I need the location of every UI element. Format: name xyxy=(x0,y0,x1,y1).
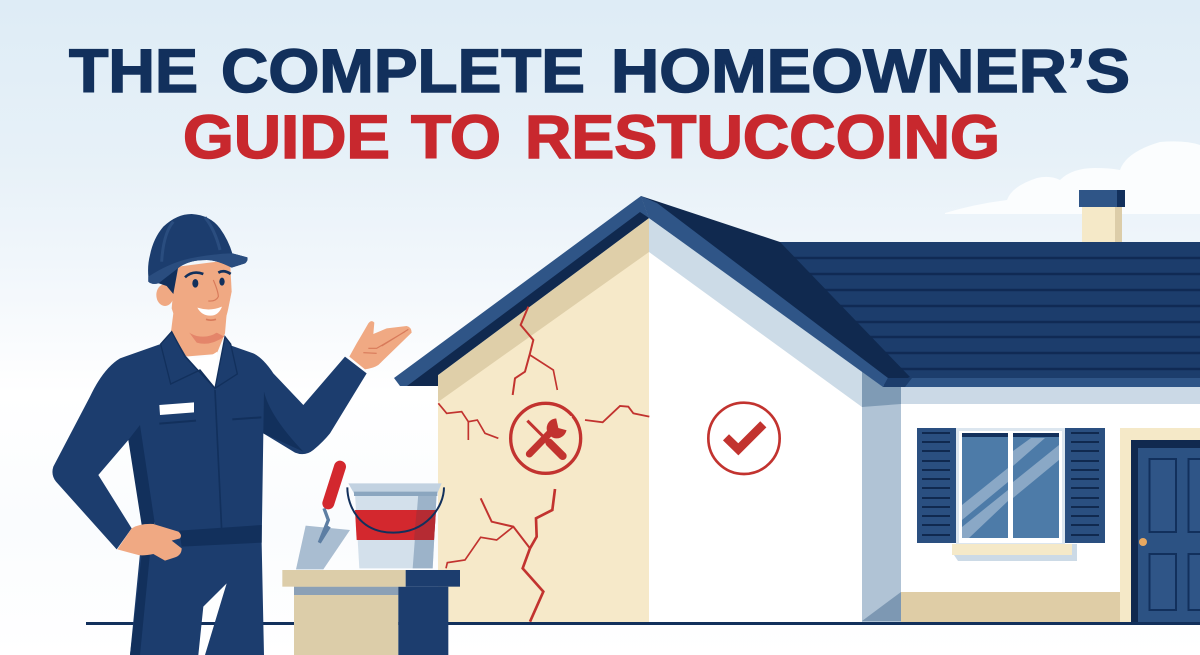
nose xyxy=(208,280,218,301)
table xyxy=(282,570,460,655)
title line 2: TO xyxy=(411,103,501,171)
side shading xyxy=(128,392,303,655)
title line 2 xyxy=(183,103,1000,171)
icon: tools in circle xyxy=(511,403,581,473)
bucket xyxy=(347,483,444,568)
cloud xyxy=(945,141,1200,214)
window sill xyxy=(952,544,1077,561)
uniform body xyxy=(52,332,367,655)
base trim xyxy=(901,592,1121,622)
collars xyxy=(161,332,237,388)
house xyxy=(394,190,1200,623)
door xyxy=(1120,428,1200,623)
left shutter xyxy=(917,428,956,543)
main wall xyxy=(901,404,1200,623)
worker xyxy=(52,214,412,655)
pocket seams xyxy=(159,417,261,424)
chimney xyxy=(1079,190,1125,243)
belt xyxy=(179,525,262,547)
window glass xyxy=(962,433,1059,538)
title line 1: THE xyxy=(69,37,198,105)
cream cracked wall xyxy=(438,218,649,622)
tools and worker xyxy=(52,214,460,655)
door knob xyxy=(1139,538,1147,546)
hard hat xyxy=(148,214,248,284)
trowel xyxy=(296,467,350,569)
left crack xyxy=(438,403,498,440)
head xyxy=(156,260,232,337)
title line 2: RESTUCCOING xyxy=(525,103,1000,171)
palm lines xyxy=(363,329,408,353)
neck xyxy=(171,313,227,357)
raised hand xyxy=(349,321,412,369)
screwdriver xyxy=(527,421,563,456)
window xyxy=(917,428,1105,561)
title xyxy=(69,37,1130,171)
shirt xyxy=(186,352,217,390)
smile xyxy=(197,307,222,316)
eyes xyxy=(192,278,225,288)
zipper xyxy=(215,390,222,530)
right crack xyxy=(585,406,649,422)
eyebrows xyxy=(185,271,231,277)
white gable wall xyxy=(649,218,862,622)
ground line xyxy=(86,622,1200,625)
icon: check in circle xyxy=(708,403,780,474)
tan wall band xyxy=(438,218,649,402)
hand on hip xyxy=(117,524,182,561)
window frame xyxy=(956,428,1065,544)
name badge xyxy=(159,402,194,415)
corner pillar xyxy=(862,370,901,623)
bottom crack xyxy=(446,489,555,622)
wrench xyxy=(529,416,572,454)
face xyxy=(172,260,232,337)
title line 1: HOMEOWNER’S xyxy=(611,37,1130,105)
hair xyxy=(157,267,178,294)
title line 2: GUIDE xyxy=(183,103,390,171)
upper wall band xyxy=(901,387,1200,404)
main roof xyxy=(780,242,1200,387)
title line 1: COMPLETE xyxy=(221,37,585,105)
right shutter xyxy=(1065,428,1105,543)
lower lip xyxy=(206,317,216,323)
top crack xyxy=(513,307,557,395)
title line 1 xyxy=(69,37,1130,105)
cracks xyxy=(438,307,780,622)
gable roof xyxy=(394,196,912,387)
neck shadow xyxy=(180,320,224,344)
gable shadow band xyxy=(649,218,862,407)
